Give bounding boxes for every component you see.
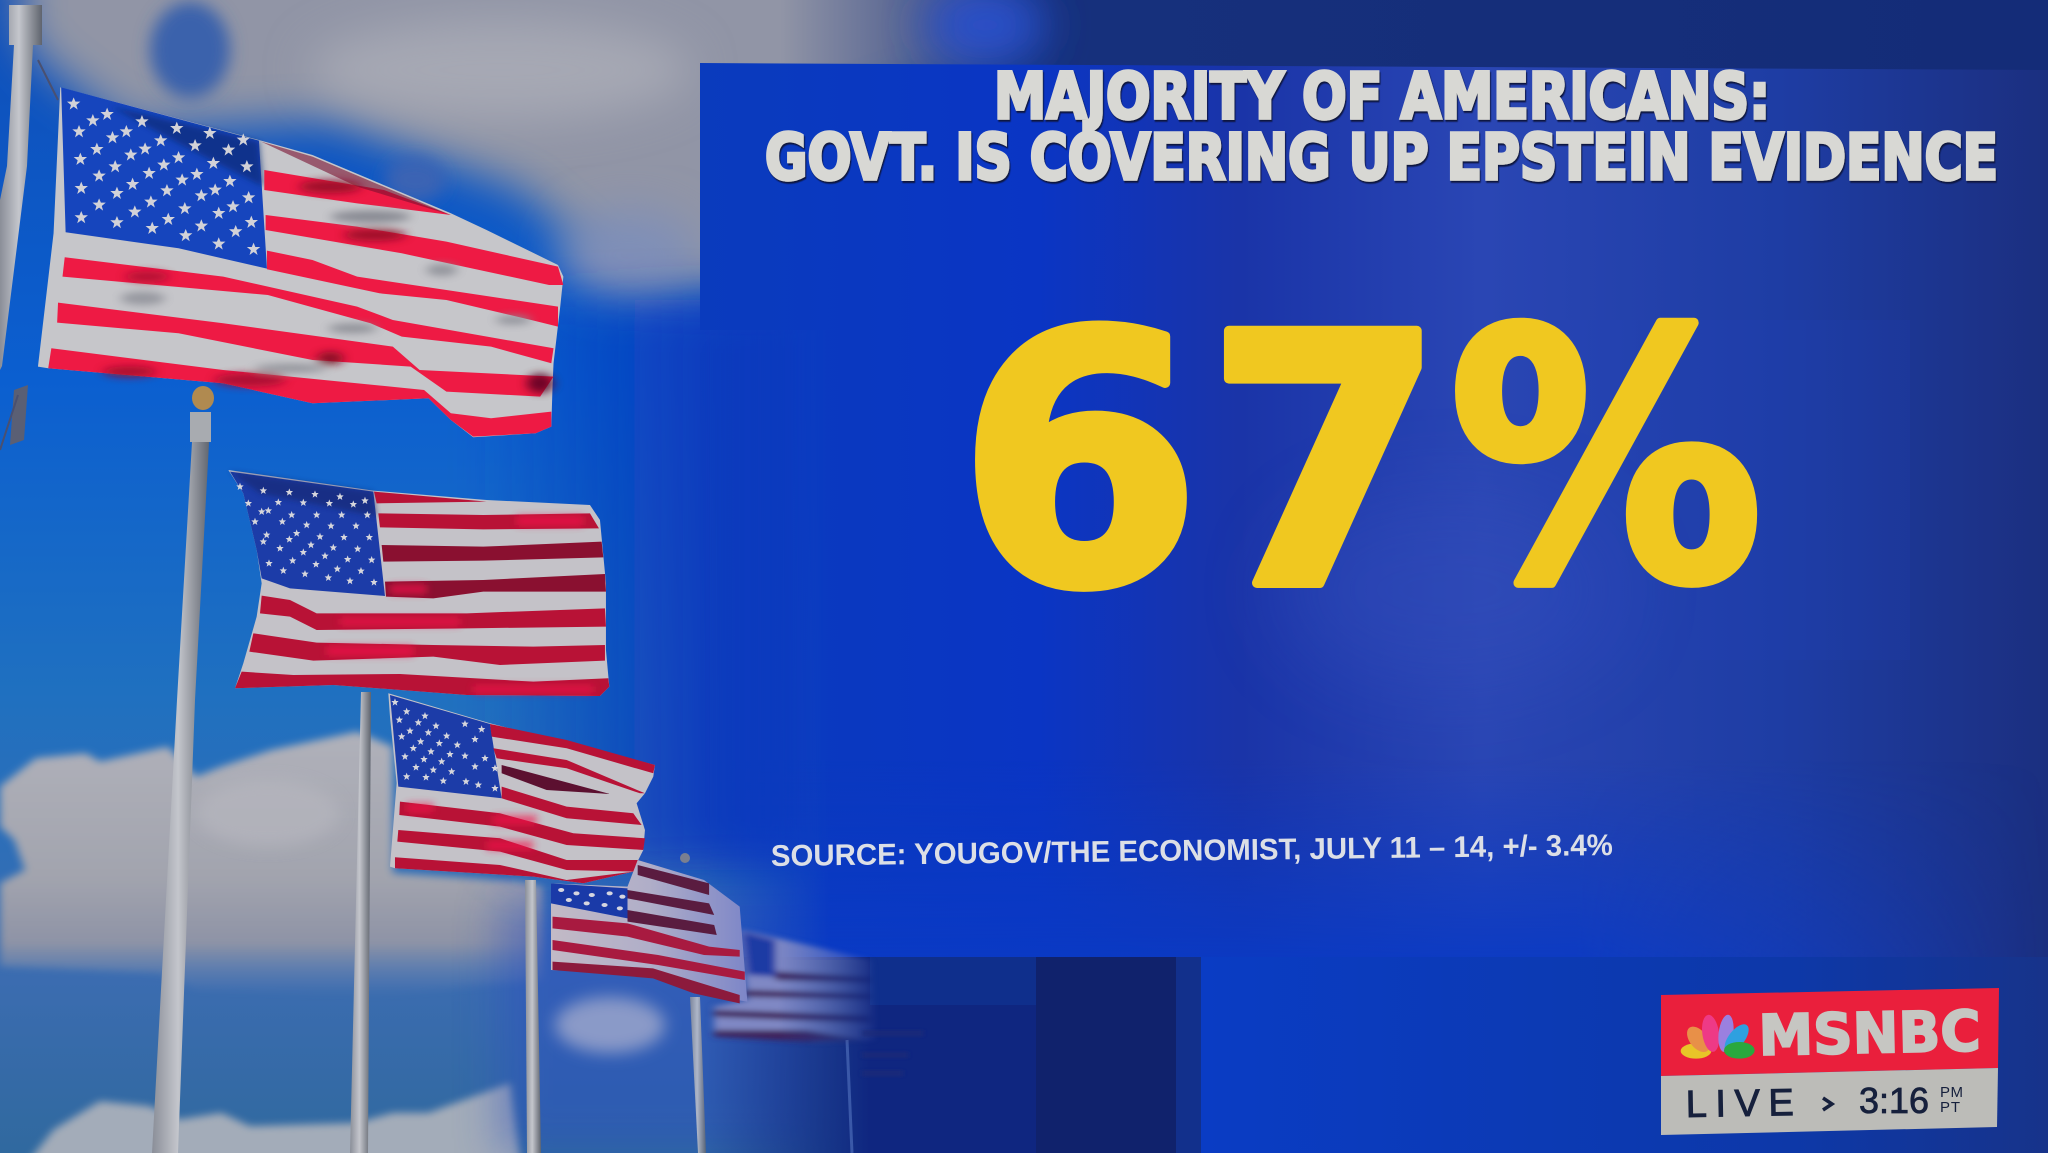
big number: 67%: 6	[958, 261, 1200, 664]
PM PT: PT	[1940, 1099, 1960, 1116]
title	[765, 60, 1998, 194]
icon: stars	[391, 698, 499, 792]
stripe highlights	[327, 517, 593, 693]
logo: MSNBC live bug	[1661, 988, 1999, 1135]
clouds	[0, 0, 1000, 1153]
flag 5	[714, 930, 877, 1042]
flag 3	[388, 693, 655, 883]
PM PT: PM	[1940, 1084, 1963, 1101]
title: MAJORITY OF AMERICANS:	[994, 60, 1770, 133]
icon: peacock	[1681, 1014, 1755, 1059]
icon: stars	[236, 483, 378, 586]
lower sky tint	[500, 900, 820, 1153]
time: 3:16	[1859, 1080, 1929, 1121]
stripe highlights	[407, 804, 537, 849]
top strip	[780, 0, 2048, 80]
chevron	[1823, 1098, 1832, 1110]
flag poles	[0, 5, 852, 1153]
big number: 67%: 7	[1206, 262, 1444, 665]
flag 1	[38, 87, 563, 437]
lower cloud	[0, 732, 543, 1153]
source line: SOURCE: YOUGOV/THE ECONOMIST, JULY 11 – 14, +/- 3.4%	[771, 829, 1613, 873]
grey status panel	[1661, 1068, 1998, 1135]
big number: 67%	[958, 260, 1762, 665]
flag 6: faint	[862, 1030, 923, 1077]
LIVE label: LIVE	[1685, 1082, 1794, 1126]
big number: 67%: %	[1450, 260, 1762, 660]
flag 2	[228, 470, 609, 696]
icon: stars	[67, 97, 260, 255]
flag 4	[551, 860, 747, 1003]
MSNBC wordmark: MSNBC	[1758, 999, 1981, 1069]
PM PT	[1940, 1084, 1963, 1116]
panel: lower band	[700, 957, 2048, 1153]
panel: blue background	[700, 63, 2048, 960]
panel seam blend	[480, 300, 820, 870]
red logo panel	[1661, 988, 1999, 1076]
